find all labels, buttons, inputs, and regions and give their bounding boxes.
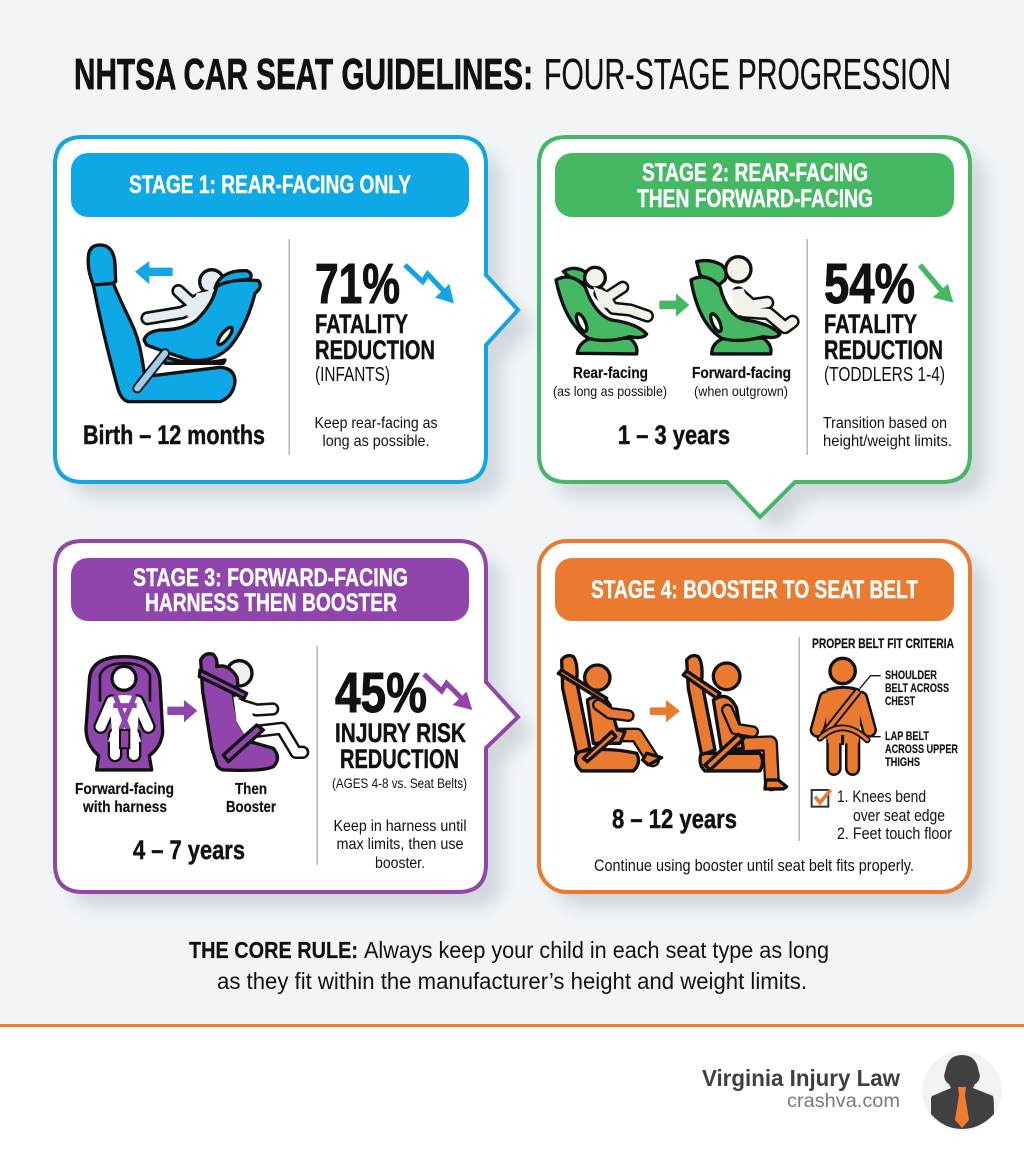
belt fit heading: PROPER BELT FIT CRITERIA [812, 635, 954, 651]
icon: child on seat belt [683, 656, 787, 789]
stage 4 header [555, 558, 954, 621]
stat label: (TODDLERS 1-4) [824, 364, 945, 386]
stage 2 header [555, 153, 954, 217]
stage 3 header: STAGE 3: FORWARD-FACING [133, 564, 408, 592]
belt callouts: CHEST [885, 694, 915, 708]
note [314, 415, 438, 450]
belt callouts: BELT ACROSS [885, 681, 949, 695]
seat captions: Booster [226, 799, 276, 816]
age label: 8 – 12 years [612, 804, 737, 834]
note [334, 818, 466, 872]
seat captions: with harness [82, 799, 167, 816]
belt callouts: ACROSS UPPER [885, 742, 958, 756]
belt callouts: SHOULDER [885, 668, 937, 682]
criteria list [837, 787, 952, 843]
title: NHTSA CAR SEAT GUIDELINES: [74, 50, 533, 99]
icon: belt fit figure [817, 658, 881, 768]
divider [316, 646, 318, 865]
stage 2 header: STAGE 2: REAR-FACING [642, 159, 868, 187]
stat label: REDUCTION [315, 335, 435, 365]
stage 1 header [71, 153, 469, 217]
divider [806, 239, 808, 455]
age label: 4 – 7 years [133, 835, 245, 865]
core rule: as they fit within the manufacturer’s height and weight limits. [217, 968, 807, 994]
divider [288, 239, 290, 455]
seat captions: Forward-facing [75, 781, 174, 798]
core rule: Always keep your child in each seat type as long [364, 937, 829, 963]
stage 1 header: STAGE 1: REAR-FACING ONLY [129, 171, 411, 199]
icon: rear-facing seat [556, 267, 689, 354]
criteria list: 1. Knees bend [837, 787, 926, 806]
seat captions [75, 781, 276, 816]
stage 3 header: HARNESS THEN BOOSTER [145, 589, 397, 617]
panel: stage 3 [55, 541, 534, 908]
icon: booster seat [199, 654, 303, 770]
stat: 54 percent: 54% [824, 252, 915, 316]
stage 3 header [71, 558, 469, 621]
note: Continue using booster until seat belt fits properly. [594, 856, 914, 875]
seat captions: Rear-facing [573, 365, 648, 382]
note: max limits, then use [336, 836, 464, 853]
core rule [189, 937, 829, 994]
icon: lawyer avatar [922, 1051, 1002, 1131]
seat captions: Forward-facing [692, 365, 791, 382]
stage 2 header: THEN FORWARD-FACING [637, 185, 873, 213]
icon: child on booster [558, 656, 680, 771]
brand name: crashva.com [787, 1091, 900, 1112]
icon: forward-facing seat [691, 257, 793, 354]
icon: rear-facing infant seat [88, 245, 260, 402]
seat captions: Then [235, 781, 267, 798]
stat label: (AGES 4-8 vs. Seat Belts) [332, 775, 467, 791]
age label: Birth – 12 months [83, 420, 265, 450]
stat: 45 percent: 45% [335, 661, 427, 725]
seat captions: (when outgrown) [694, 383, 788, 399]
belt callouts: LAP BELT [885, 729, 930, 743]
stat label [315, 309, 435, 386]
stat label: (INFANTS) [315, 364, 390, 386]
age label: 1 – 3 years [618, 420, 730, 450]
footer [0, 1024, 1024, 1154]
stat label [332, 718, 467, 791]
divider [798, 637, 800, 841]
note: height/weight limits. [823, 433, 952, 450]
belt callouts [885, 668, 958, 769]
panel: stage 1 [55, 137, 534, 498]
seat captions [553, 365, 791, 399]
note [823, 415, 952, 450]
stat label: REDUCTION [824, 335, 943, 365]
icon: down arrow [920, 265, 953, 303]
belt callouts: THIGHS [885, 755, 920, 769]
stat label [824, 309, 945, 386]
stat: 71 percent: 71% [315, 252, 400, 316]
stat label: REDUCTION [340, 744, 459, 774]
icon: forward-facing harness seat [86, 657, 197, 770]
note: Transition based on [823, 415, 947, 432]
note: long as possible. [322, 433, 430, 450]
seat captions: (as long as possible) [553, 383, 667, 399]
icon: down arrow [405, 265, 454, 303]
stat label: FATALITY [315, 309, 408, 339]
brand name [702, 1065, 900, 1112]
panel: stage 4 [539, 541, 986, 908]
brand name: Virginia Injury Law [702, 1065, 900, 1091]
note: booster. [375, 855, 425, 872]
icon: down arrow [424, 674, 472, 710]
note: Keep rear-facing as [314, 415, 438, 432]
criteria list: over seat edge [853, 806, 945, 825]
stat label: FATALITY [824, 309, 917, 339]
core rule: THE CORE RULE: [189, 937, 358, 963]
icon: checkbox [812, 790, 831, 807]
criteria list: 2. Feet touch floor [837, 824, 952, 843]
stage 4 header: STAGE 4: BOOSTER TO SEAT BELT [591, 576, 918, 604]
panel: stage 2 [539, 137, 986, 533]
stat label: INJURY RISK [335, 718, 466, 748]
note: Keep in harness until [334, 818, 466, 835]
